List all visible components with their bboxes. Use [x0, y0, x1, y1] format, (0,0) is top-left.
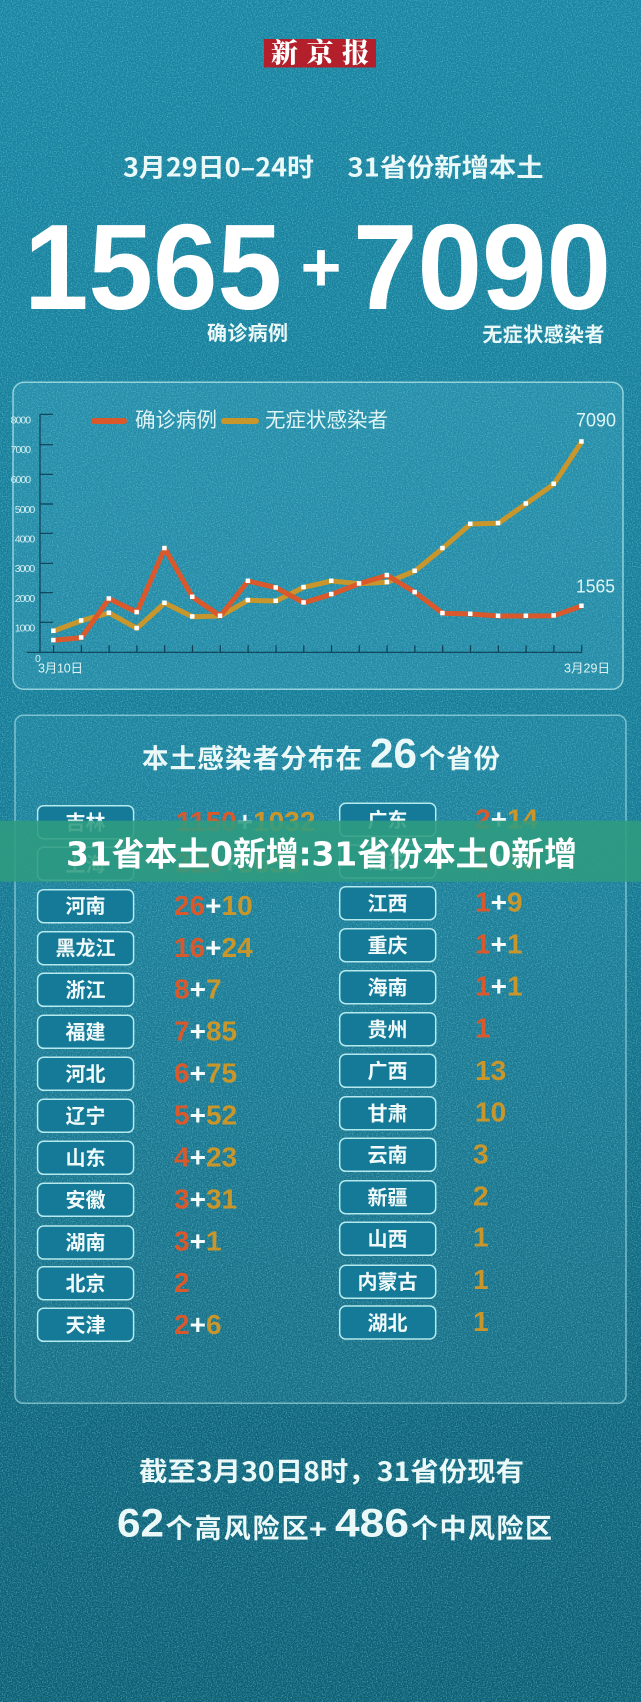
甘肃: 甘肃 — [368, 1098, 408, 1126]
江苏: 江苏 — [368, 846, 408, 875]
山西 — [340, 1222, 489, 1255]
云南: 3 — [473, 1138, 489, 1169]
河南: 河南 — [66, 890, 106, 919]
y axis labels: 7000 — [11, 444, 31, 456]
广西 — [340, 1054, 506, 1087]
海南 — [340, 970, 523, 1004]
内蒙古 — [340, 1264, 489, 1298]
福建: 福建 — [66, 1016, 106, 1045]
黑龙江 — [38, 932, 253, 965]
安徽: 安徽 — [66, 1184, 106, 1213]
吉林: 吉林 — [66, 807, 106, 836]
山西: 山西 — [368, 1223, 408, 1252]
risk area counts: 个高风险区 — [166, 1507, 309, 1546]
广西: 13 — [475, 1055, 506, 1086]
axes — [27, 414, 582, 652]
title: 31省份新增本土 — [348, 148, 544, 184]
risk area counts: 62 — [117, 1502, 164, 1546]
x axis labels: 3月10日 — [38, 662, 83, 676]
y axis labels: 5000 — [15, 504, 35, 516]
黑龙江: 16+24 — [174, 932, 253, 963]
panel background — [13, 382, 623, 689]
y axis labels: 6000 — [11, 474, 31, 486]
河北: 河北 — [66, 1058, 106, 1087]
title: 3月29日0–24时 — [123, 148, 314, 184]
甘肃: 10 — [475, 1097, 506, 1128]
上海 — [38, 847, 300, 880]
label: confirmed: 确诊病例 — [207, 317, 288, 346]
end value: asymptomatic: 7090 — [576, 410, 616, 432]
overlay banner — [0, 821, 641, 882]
云南 — [340, 1138, 489, 1171]
legend — [94, 403, 388, 433]
江西: 1+9 — [475, 887, 523, 918]
logo: 新京报: 新京报 — [271, 32, 369, 70]
江西: 江西 — [368, 888, 408, 916]
吉林 — [38, 806, 315, 839]
北京 — [38, 1267, 190, 1300]
新疆: 2 — [473, 1181, 489, 1212]
湖南 — [38, 1225, 222, 1259]
广东 — [340, 803, 539, 836]
big number: confirmed cases: 1565 — [24, 199, 282, 335]
河南: 26+10 — [174, 890, 253, 921]
上海: 326+5656 — [175, 848, 300, 878]
贵州: 1 — [475, 1012, 491, 1044]
湖北: 湖北 — [368, 1307, 408, 1336]
江苏 — [340, 845, 538, 878]
内蒙古: 内蒙古 — [358, 1266, 418, 1295]
y axis labels: 2000 — [15, 593, 35, 605]
重庆: 重庆 — [368, 930, 408, 958]
湖北: 1 — [473, 1306, 489, 1337]
header section — [24, 32, 611, 348]
title — [123, 148, 544, 184]
山东 — [38, 1141, 237, 1174]
江苏: 1+32 — [475, 845, 538, 876]
line: asymptomatic — [54, 442, 582, 631]
risk area counts: + — [309, 1513, 327, 1544]
云南: 云南 — [368, 1139, 408, 1168]
安徽: 3+31 — [174, 1184, 237, 1215]
天津: 2+6 — [174, 1309, 222, 1340]
福建: 7+85 — [174, 1016, 237, 1046]
广西: 广西 — [368, 1055, 408, 1084]
甘肃 — [340, 1097, 506, 1130]
x axis labels: 3月29日 — [564, 662, 610, 676]
y axis labels: 3000 — [15, 563, 35, 575]
y axis labels: 1000 — [15, 622, 35, 634]
y axis labels — [11, 414, 41, 665]
贵州 — [340, 1012, 491, 1046]
risk area date line: 截至3月30日8时，31省份现有 — [139, 1450, 524, 1489]
辽宁: 5+52 — [174, 1100, 237, 1131]
banner text: 31省本土0新增:31省份本土0新增 — [66, 834, 577, 874]
浙江: 浙江 — [66, 974, 106, 1003]
湖南: 3+1 — [174, 1225, 222, 1256]
天津 — [38, 1308, 222, 1341]
end value: confirmed: 1565 — [576, 576, 615, 597]
plus sign: + — [300, 228, 342, 306]
panel: province distribution — [15, 715, 626, 1403]
山西: 1 — [473, 1222, 489, 1253]
广东: 广东 — [368, 804, 408, 833]
辽宁 — [38, 1099, 237, 1132]
海南: 海南 — [368, 972, 408, 1000]
河南 — [38, 890, 253, 923]
panel: trend chart — [11, 382, 623, 689]
heading: 个省份 — [419, 737, 500, 776]
risk area counts: 486 — [335, 1502, 409, 1546]
湖南: 湖南 — [66, 1227, 106, 1256]
heading: 本土感染者分布在 — [142, 737, 362, 776]
重庆 — [340, 928, 523, 962]
上海: 上海 — [66, 848, 106, 877]
吉林: 1150+1032 — [176, 806, 315, 837]
山东: 4+23 — [174, 1142, 237, 1173]
y axis labels: 0 — [35, 653, 41, 665]
footer text — [117, 1450, 552, 1546]
浙江: 8+7 — [174, 974, 222, 1004]
legend: 确诊病例 — [135, 403, 217, 433]
重庆: 1+1 — [475, 928, 523, 960]
新疆 — [340, 1181, 489, 1214]
贵州: 贵州 — [368, 1014, 408, 1042]
河北 — [38, 1057, 237, 1090]
line: confirmed — [54, 548, 582, 640]
banner band — [0, 821, 641, 882]
heading: 26 — [370, 730, 417, 776]
内蒙古: 1 — [473, 1264, 489, 1295]
新疆: 新疆 — [368, 1182, 408, 1210]
big number: asymptomatic: 7090 — [353, 199, 611, 335]
legend: 无症状感染者 — [265, 403, 388, 433]
risk area counts — [117, 1502, 552, 1546]
黑龙江: 黑龙江 — [56, 932, 116, 961]
福建 — [38, 1015, 237, 1048]
广东: 2+14 — [475, 804, 539, 834]
浙江 — [38, 973, 222, 1006]
y axis labels: 8000 — [11, 414, 31, 426]
y axis labels: 4000 — [15, 534, 35, 546]
河北: 6+75 — [174, 1058, 237, 1088]
panel background — [15, 715, 626, 1403]
天津: 天津 — [66, 1309, 106, 1338]
heading — [142, 730, 500, 776]
risk area counts: 个中风险区 — [411, 1507, 552, 1546]
北京: 北京 — [66, 1268, 106, 1296]
湖北 — [340, 1306, 489, 1339]
辽宁: 辽宁 — [66, 1100, 106, 1129]
label: asymptomatic: 无症状感染者 — [482, 318, 604, 348]
江西 — [340, 887, 523, 920]
安徽 — [38, 1183, 237, 1216]
北京: 2 — [174, 1267, 190, 1298]
海南: 1+1 — [475, 970, 523, 1002]
x axis labels — [38, 662, 610, 676]
山东: 山东 — [66, 1142, 106, 1171]
